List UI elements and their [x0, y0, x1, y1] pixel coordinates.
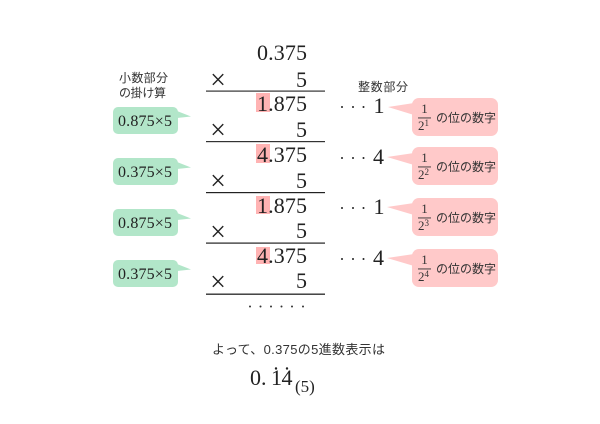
multiplication column: 1.875	[257, 193, 307, 218]
callout: 1/2^2 place digit: の位の数字	[436, 159, 496, 174]
callout: 1/2^1 place digit: 2	[418, 118, 424, 133]
result: repeating decimal: 4	[282, 365, 292, 390]
integer digit results: 4	[373, 245, 384, 270]
integer digit results: 1	[374, 194, 384, 219]
integer digit results: 1	[374, 93, 384, 118]
multiplication column: 5	[296, 168, 307, 193]
callout: 0.375×5: 0.375×5	[118, 266, 172, 283]
callout: 0.375×5	[113, 260, 191, 287]
callout: 1/2^3 place digit: 2	[418, 218, 424, 233]
conclusion text: よって、0.375の5進数表示は	[212, 342, 385, 357]
result: repeating decimal: 1	[271, 365, 282, 390]
callout: 1/2^2 place digit: 1	[421, 150, 428, 165]
callout: 1/2^3 place digit	[387, 198, 498, 236]
callout: 0.375×5: 0.375×5	[118, 164, 172, 181]
multiplication column: ×	[210, 166, 226, 197]
callout: 1/2^1 place digit: 1	[421, 101, 428, 116]
multiplication column: ×	[210, 267, 226, 298]
multiplication column: 5	[296, 117, 307, 142]
result: repeating decimal	[250, 365, 315, 396]
multiplication column: 5	[296, 218, 307, 243]
callout: 1/2^2 place digit: 2	[424, 167, 429, 177]
callout: 0.875×5	[113, 107, 191, 134]
callout: 1/2^4 place digit: 1	[421, 252, 428, 267]
result: repeating decimal: 0.	[250, 365, 266, 390]
callout: 0.875×5: 0.875×5	[118, 113, 172, 130]
multiplication column: 4.375	[257, 243, 307, 268]
multiplication column: ×	[210, 217, 226, 248]
multiplication column: ×	[210, 65, 226, 96]
result: repeating decimal: (5)	[295, 377, 315, 396]
callout: 1/2^1 place digit: の位の数字	[436, 110, 496, 125]
integer digit results	[341, 93, 384, 270]
callout: 1/2^1 place digit: 1	[424, 118, 429, 128]
heading: fractional part multiplication: の掛け算	[119, 85, 166, 100]
highlights: integer digits	[256, 93, 270, 264]
heading: fractional part multiplication	[119, 70, 168, 100]
callout: 1/2^4 place digit: の位の数字	[436, 261, 496, 276]
multiplication column: 5	[296, 67, 307, 92]
heading: integer part: 整数部分	[358, 79, 408, 94]
callout: 1/2^4 place digit: 2	[418, 269, 424, 284]
multiplication column: 0.375	[257, 40, 307, 65]
callout: 1/2^2 place digit: 2	[418, 167, 424, 182]
callout: 1/2^4 place digit	[387, 249, 498, 287]
multiplication column: 1.875	[257, 91, 307, 116]
callout: 1/2^4 place digit: 4	[424, 269, 430, 279]
callout: 1/2^3 place digit: 1	[421, 201, 428, 216]
multiplication column	[206, 40, 325, 308]
callout: 1/2^2 place digit	[387, 147, 498, 185]
callout: 0.375×5	[113, 158, 191, 185]
multiplication column: 4.375	[257, 142, 307, 167]
callout: 1/2^3 place digit: の位の数字	[436, 210, 496, 225]
callout: 1/2^3 place digit: 3	[424, 218, 430, 228]
callout: 0.875×5: 0.875×5	[118, 215, 172, 232]
callout: 1/2^1 place digit	[388, 98, 498, 136]
multiplication column: 5	[296, 268, 307, 293]
heading: fractional part multiplication: 小数部分	[119, 70, 168, 85]
multiplication column: ×	[210, 115, 226, 146]
callout: 0.875×5	[113, 209, 191, 236]
integer digit results: 4	[373, 144, 384, 169]
